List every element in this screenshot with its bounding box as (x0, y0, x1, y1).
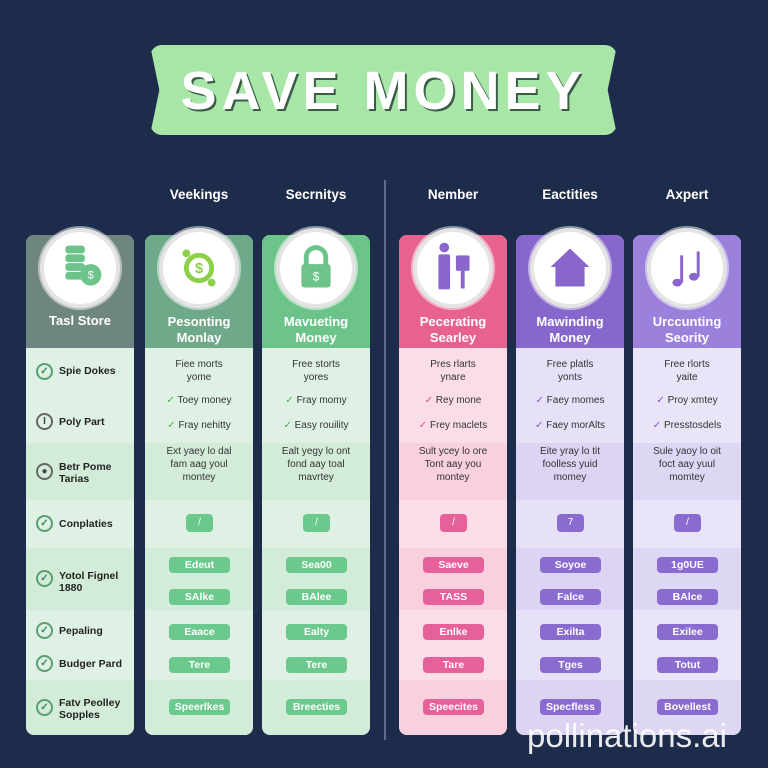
panel: column 1 feature list: Tarias (59, 473, 89, 485)
panel: column 1 feature list: Yotol Fignel (59, 570, 118, 582)
column labels: Veekings (170, 187, 228, 202)
panel: column 1 feature list: ✓ (40, 518, 49, 529)
panel: column 4: Searley (430, 330, 476, 345)
panel: column 5 (516, 235, 624, 735)
panel: column 2: yome (187, 372, 211, 383)
panel: column 3: fond aay toal (287, 459, 345, 470)
panel: column 1 feature list: Fatv Peolley (59, 697, 120, 709)
panel: column 4 (399, 235, 507, 735)
panel: column 4: montey (437, 472, 469, 483)
divider (384, 180, 386, 740)
icon: music notes (647, 228, 727, 308)
panel: column 3: Free storts (292, 359, 340, 370)
column labels: Eactities (542, 187, 598, 202)
title banner (150, 45, 617, 135)
panel: column 5: Free platls (547, 359, 593, 370)
panel: column 1 feature list (26, 235, 134, 735)
panel: column 4: Sult ycey lo ore (419, 446, 487, 457)
panel: column 2 (145, 235, 253, 735)
icon: house (530, 228, 610, 308)
panel: column 6: Urccunting (653, 314, 721, 329)
panel: column 2: Fiee morts (175, 359, 223, 370)
panel: column 6: Sule yaoy lo oit (653, 446, 721, 457)
panel: column 6: Exilee (672, 626, 703, 638)
panel: column 4: ynare (440, 372, 466, 383)
panel: column 5: 7 (568, 517, 573, 528)
panel: column 1 feature list: Poly Part (59, 416, 105, 428)
panel: column 1 feature list: ✓ (40, 702, 49, 713)
panel: column 2: Monlay (177, 330, 221, 345)
panel: column 3: ✓ Fray momy (285, 395, 347, 406)
column labels (170, 187, 708, 202)
column labels: Axpert (666, 187, 708, 202)
panel: column 3: yores (304, 372, 328, 383)
panel: column 3: Money (295, 330, 337, 345)
panel: column 5: foolless yuid (542, 459, 598, 470)
panel: column 6 (633, 235, 741, 735)
panel: column 2: Speerlkes (175, 701, 224, 713)
panel: column 1 feature list: Betr Pome (59, 461, 112, 473)
panel: column 6: / (686, 517, 689, 528)
title: SAVE MONEY (180, 61, 587, 121)
panel: column 1 feature list: Conplaties (59, 518, 113, 530)
panel: column 1 feature list: I (43, 416, 46, 427)
panel: column 6: yaite (676, 372, 698, 383)
panel: column 3: Sea00 (301, 559, 332, 571)
panel: column 6: 1g0UE (671, 559, 704, 571)
panel: column 4: Tont aay you (425, 459, 481, 470)
panel: column 4: Enlke (439, 626, 468, 638)
panel: column 2: Tere (189, 659, 210, 671)
icon: coins: $ (88, 270, 94, 282)
panel: column 5: Eite yray lo tit (540, 446, 600, 457)
panel: column 3: Ealt yegy lo ont (282, 446, 350, 457)
panel: column 5: Exilta (556, 626, 584, 638)
icon: dollar cycle (159, 228, 239, 308)
panel: column 6: Seority (665, 330, 709, 345)
panel: column 3: Mavueting (284, 314, 348, 329)
panel: column 3: Ealty (304, 626, 329, 638)
icon: person with broom (413, 228, 493, 308)
icon: dollar cycle: $ (195, 261, 203, 277)
panel: column 3: Breecties (293, 701, 340, 713)
panel: column 4: Saeve (438, 559, 469, 571)
panel: column 5: Falce (557, 591, 584, 603)
icon: coins (40, 228, 120, 308)
column labels: Nember (428, 187, 478, 202)
panel: column 4: / (452, 517, 455, 528)
panel: column 5: ✓ Faey morAlts (535, 420, 605, 431)
panel: column 6: Totut (675, 659, 700, 671)
panel: column 4: Pres rlarts (430, 359, 476, 370)
panel: column 3: ✓ Easy rouility (283, 420, 349, 431)
panel: column 2: fam aag youl (170, 459, 228, 470)
panel: column 3: Tere (306, 659, 327, 671)
panel: column 3: / (315, 517, 318, 528)
panel: column 6: foct aay yuul (659, 459, 715, 470)
panel: column 1 feature list: 1880 (59, 582, 82, 594)
panel: column 2: montey (183, 472, 215, 483)
panel: column 5: Specfless (546, 701, 595, 713)
panel: column 6: momtey (669, 472, 705, 483)
panel: column 2: Ext yaey lo dal (166, 446, 232, 457)
icon: lock: $ (313, 271, 320, 284)
panel: column 3 (262, 235, 370, 735)
panel: column 1 feature list: ✓ (40, 625, 49, 636)
panel: column 1 feature list: ✓ (40, 658, 49, 669)
panel: column 6: Bovellest (664, 701, 711, 713)
column labels: Secrnitys (286, 187, 346, 202)
panel: column 2: Eaace (184, 626, 215, 638)
panel: column 2: ✓ Fray nehitty (167, 420, 231, 431)
panel: column 5: Tges (558, 659, 583, 671)
panel: column 2: ✓ Toey money (167, 395, 231, 406)
panel: column 3: mavrtey (298, 472, 334, 483)
panel: column 6: ✓ Proy xmtey (656, 395, 718, 406)
panel: column 4: ✓ Rey mone (425, 395, 481, 406)
panel: column 5: Money (549, 330, 591, 345)
panel: column 3: BAlee (302, 591, 331, 603)
panel: column 4: Tare (443, 659, 464, 671)
panel: column 4: Pecerating (420, 314, 486, 329)
panel: column 1 feature list: Budger Pard (59, 658, 122, 670)
panel: column 2: Edeut (185, 559, 214, 571)
panel: column 2: / (198, 517, 201, 528)
panel: column 6: ✓ Presstosdels (653, 420, 721, 431)
panel: column 5: yonts (558, 372, 582, 383)
icon: lock (276, 228, 356, 308)
panel: column 1 feature list: ✓ (40, 366, 49, 377)
panel: column 1 feature list: ● (41, 466, 48, 477)
panel: column 1 feature list: Tasl Store (49, 313, 111, 328)
panel: column 1 feature list: ✓ (40, 573, 49, 584)
panel: column 5: ✓ Faey momes (536, 395, 604, 406)
panel: column 5: Soyoe (555, 559, 586, 571)
panel: column 5: Mawinding (536, 314, 604, 329)
panel: column 4: TASS (440, 591, 467, 603)
panel: column 4: ✓ Frey maclets (419, 420, 487, 431)
panel: column 1 feature list: Spie Dokes (59, 365, 116, 377)
panel: column 5: momey (554, 472, 586, 483)
panel: column 4: Speecites (429, 701, 478, 713)
panel: column 2: SAlke (185, 591, 214, 603)
panel: column 2: Pesonting (168, 314, 230, 329)
panel: column 6: BAlce (673, 591, 702, 603)
panel: column 1 feature list: Pepaling (59, 625, 103, 637)
panel: column 1 feature list: Sopples (59, 709, 100, 721)
panel: column 6: Free rlorts (664, 359, 710, 370)
watermark: pollinations.ai (527, 717, 727, 754)
